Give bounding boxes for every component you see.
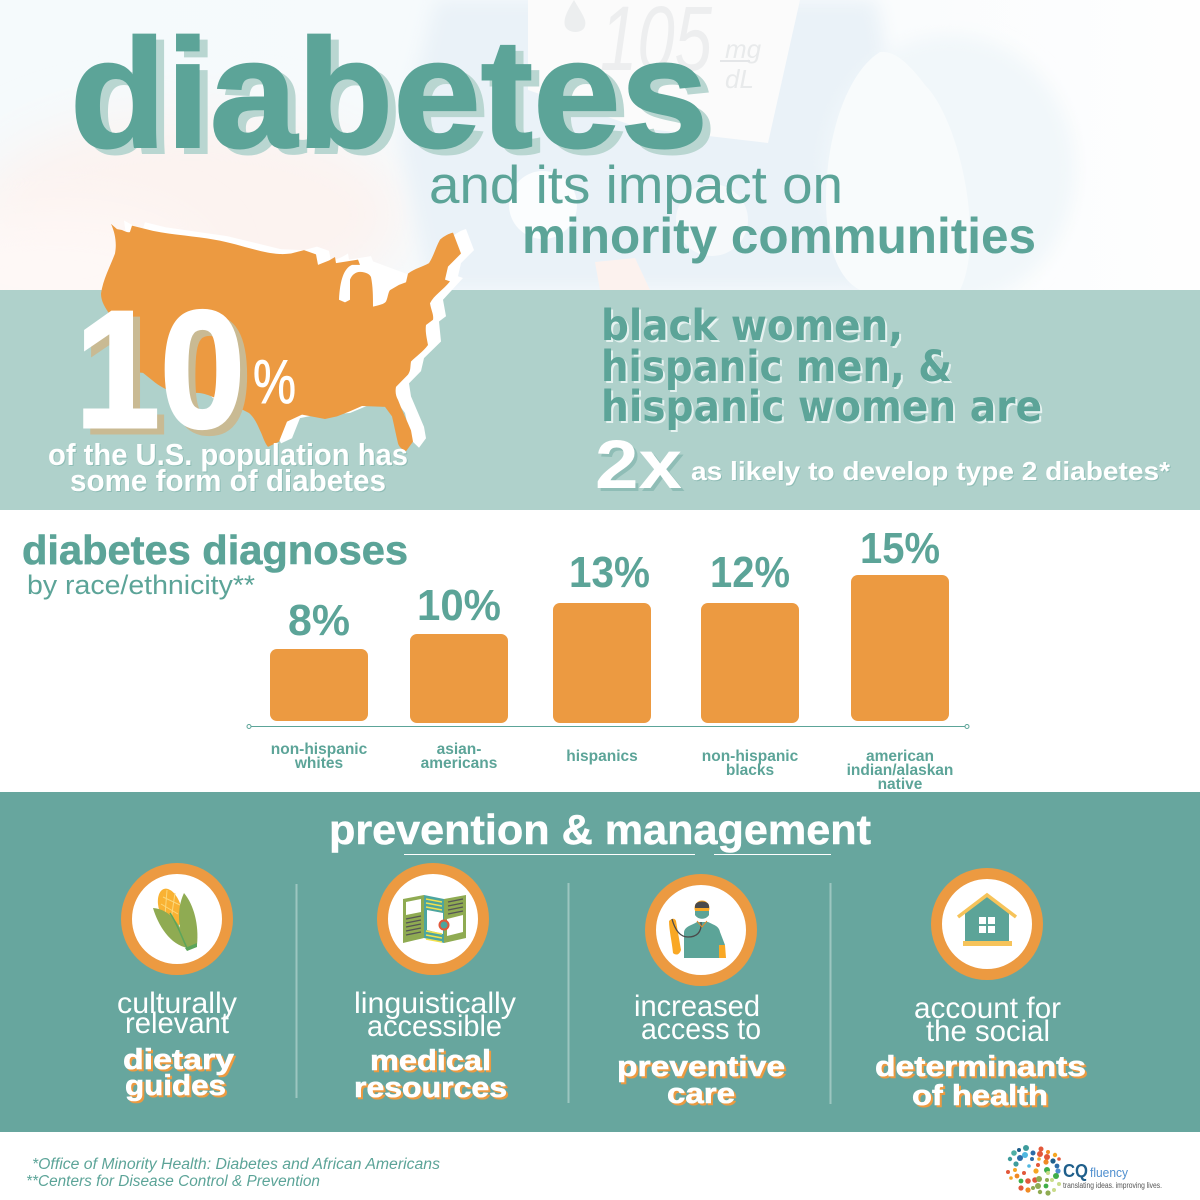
panel: prevention and management — [0, 792, 1200, 1132]
item: medical resources — [354, 868, 516, 1106]
text: account for the social determinants of health: of health — [912, 1080, 1048, 1112]
band: statistics background — [0, 290, 1200, 510]
text: culturally relevant dietary guides: dietary — [125, 1046, 236, 1078]
text: linguistically accessible medical resources: resources — [356, 1074, 509, 1106]
bar: hispanics: 13% — [569, 548, 650, 597]
bar: asian-americans: 10% — [417, 581, 501, 630]
chart heading — [22, 527, 408, 600]
logo: CQ fluency — [1006, 1145, 1162, 1196]
footnotes: *Office of Minority Health: Diabetes and African Americans — [32, 1156, 440, 1173]
logo: CQ fluency: translating ideas. improving lives. — [1063, 1181, 1162, 1190]
bar: non-hispanic blacks: 12% — [710, 548, 790, 597]
bar: american indian/alaskan native: 15% — [860, 524, 940, 573]
footnotes — [26, 1156, 440, 1190]
bar: asian-americans: americans — [421, 755, 497, 772]
text: account for the social determinants of health: determinants — [877, 1053, 1088, 1085]
map of the United States — [101, 220, 474, 451]
text: groups at higher risk — [601, 301, 1044, 434]
chart heading: by race/ethnicity** — [27, 570, 256, 600]
bar: non-hispanic blacks — [701, 548, 799, 779]
item: dietary guides — [117, 868, 237, 1104]
text: increased access to preventive care: care — [669, 1080, 737, 1112]
statistic: 2x as likely — [595, 426, 1172, 506]
logo: CQ fluency: fluency — [1090, 1165, 1128, 1180]
statistic: 2x as likely: 2x — [595, 426, 682, 503]
text: linguistically accessible medical resources: medical — [372, 1047, 493, 1079]
bar: asian-americans: asian- — [437, 741, 481, 758]
text: culturally relevant dietary guides — [117, 987, 237, 1104]
bar: non-hispanic whites: whites — [294, 755, 343, 772]
bar: hispanics: hispanics — [566, 748, 638, 765]
text: groups at higher risk: hispanic men, & — [603, 344, 954, 394]
text: linguistically accessible medical resources: linguistically — [354, 987, 516, 1020]
bar: hispanics — [553, 548, 651, 765]
text: account for the social determinants of health: account for — [914, 992, 1061, 1025]
subtitle: and its impact on — [429, 156, 843, 215]
text: linguistically accessible medical resources: accessible — [367, 1010, 502, 1043]
text: culturally relevant dietary guides: relevant — [125, 1007, 230, 1040]
bar: asian-americans — [410, 581, 508, 772]
heading: prevention and management: prevention & management — [329, 806, 871, 853]
text: account for the social determinants of health: determinants — [875, 1051, 1086, 1083]
icon: corn — [126, 868, 228, 970]
text: account for the social determinants of health: of health — [914, 1082, 1050, 1114]
text: population share: of the U.S. population has — [48, 437, 408, 472]
text: groups at higher risk: hispanic women are — [603, 384, 1044, 434]
bar: american indian/alaskan native: american — [866, 748, 934, 765]
text: groups at higher risk: black women, — [601, 301, 903, 351]
statistic: 2x as likely: as likely to develop type 2 diabetes* — [691, 456, 1171, 486]
text: groups at higher risk: hispanic women are — [601, 382, 1042, 432]
title: diabetes — [78, 13, 716, 186]
footnotes: **Centers for Disease Control & Prevention — [26, 1173, 320, 1190]
item: preventive care — [617, 880, 787, 1112]
text: linguistically accessible medical resources: resources — [354, 1072, 507, 1104]
text: groups at higher risk: hispanic men, & — [601, 342, 952, 392]
bar: american indian/alaskan native: indian/alaskan — [847, 762, 953, 779]
title: diabetes — [70, 7, 708, 180]
text: increased access to preventive care: access to — [641, 1013, 761, 1046]
text: increased access to preventive care — [617, 990, 787, 1112]
bar: non-hispanic blacks: blacks — [726, 762, 774, 779]
text: culturally relevant dietary guides: dietary — [123, 1044, 234, 1076]
text: linguistically accessible medical resources: medical — [370, 1045, 491, 1077]
icon: doctor with stethoscope — [650, 880, 752, 980]
text: population share: of the U.S. population has — [49, 438, 409, 473]
text: account for the social determinants of health — [875, 992, 1088, 1114]
text: groups at higher risk: black women, — [603, 303, 905, 353]
icon: house — [936, 874, 1038, 974]
bar: american indian/alaskan native — [847, 524, 953, 793]
header background photo: glucose meter: mg — [725, 34, 762, 64]
icon: brochure — [382, 868, 484, 970]
header background photo: glucose meter: dL — [725, 64, 754, 94]
statistic: 10 percent: 10 — [82, 283, 252, 469]
text: increased access to preventive care: increased — [634, 990, 760, 1023]
statistic: 2x as likely: 2x — [598, 429, 685, 506]
chart heading: diabetes diagnoses — [22, 527, 408, 573]
bar: american indian/alaskan native: native — [878, 776, 923, 793]
bar: non-hispanic whites: 8% — [288, 596, 350, 645]
item: social determinants of health — [875, 874, 1088, 1114]
header background photo: glucose meter — [0, 0, 1075, 290]
text: culturally relevant dietary guides: guides — [125, 1070, 226, 1102]
text: culturally relevant dietary guides: guides — [127, 1072, 228, 1104]
text: increased access to preventive care: preventive — [617, 1051, 785, 1083]
text: increased access to preventive care: preventive — [619, 1053, 787, 1085]
text: population share: some form of diabetes — [71, 464, 387, 499]
bar: non-hispanic blacks: non-hispanic — [702, 748, 799, 765]
text: culturally relevant dietary guides: culturally — [117, 987, 237, 1020]
text: increased access to preventive care: care — [667, 1078, 735, 1110]
text: population share — [48, 437, 409, 499]
bar chart — [247, 524, 969, 793]
subtitle: minority communities — [522, 208, 1036, 264]
logo: CQ fluency: CQ — [1063, 1161, 1088, 1181]
bar: non-hispanic whites — [270, 596, 368, 772]
statistic: 10 percent: % — [253, 348, 296, 417]
text: linguistically accessible medical resources — [354, 987, 516, 1106]
bar: non-hispanic whites: non-hispanic — [271, 741, 368, 758]
subtitle — [429, 156, 1036, 264]
text: population share: some form of diabetes — [70, 463, 386, 498]
statistic: 2x as likely: as likely to develop type 2 diabetes* — [692, 457, 1172, 487]
statistic: 10 percent: 10 — [75, 277, 245, 463]
text: account for the social determinants of health: the social — [926, 1015, 1050, 1048]
